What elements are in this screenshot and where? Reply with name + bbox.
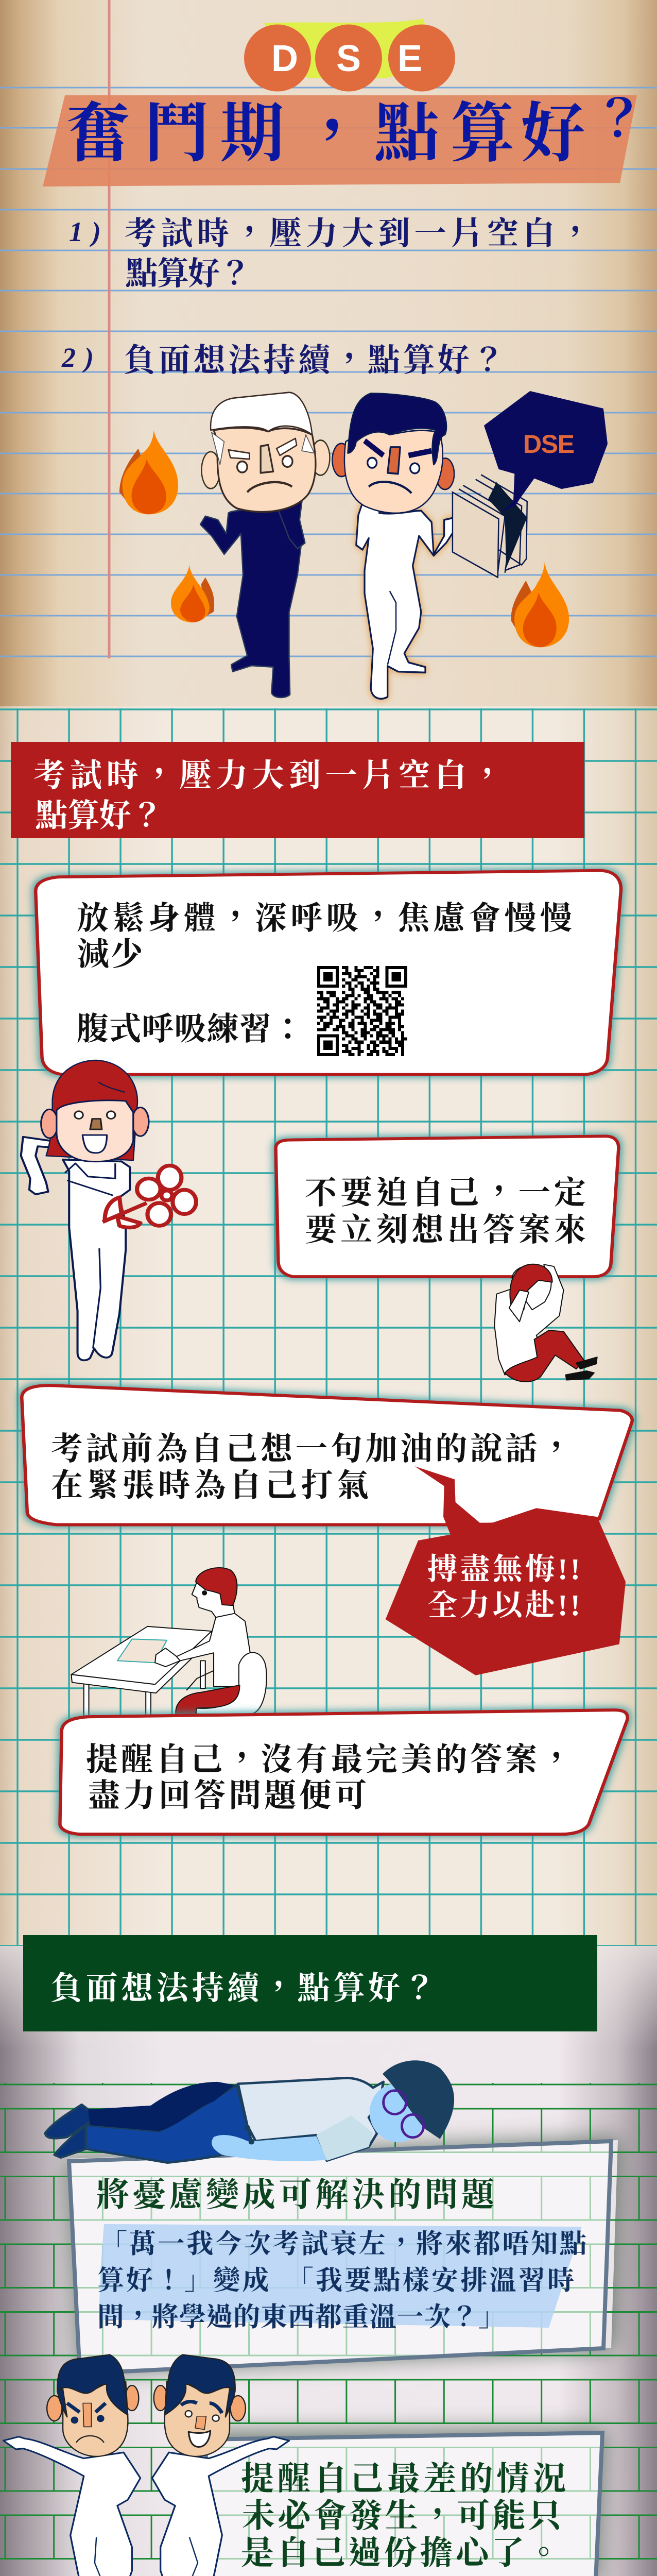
panel: turn worries into solvable problems — [69, 2141, 611, 2374]
panel: relax and breathe: 放鬆身體，深呼吸，焦慮會慢慢 — [77, 901, 572, 936]
panel: worst case may not happen: 提醒自己最差的情況 — [241, 2461, 566, 2497]
panel: worst case may not happen: 是自己過份擔心了。 — [241, 2535, 560, 2571]
heading: negative thoughts: 負面想法持續，點算好？ — [50, 1971, 436, 2006]
highlight block — [99, 2224, 582, 2328]
intro list — [61, 216, 591, 378]
badge: DSE circles — [244, 19, 455, 92]
panel: do not force yourself: 不要迫自己，一定 — [305, 1175, 586, 1211]
section background: green brick grid — [0, 1946, 657, 2576]
panel: relax and breathe — [36, 871, 621, 1075]
intro list: 點算好？ — [126, 256, 251, 292]
panel: self-encouragement: 在緊張時為自己打氣 — [51, 1468, 369, 1503]
character: person holding head — [494, 1264, 597, 1382]
character: student at desk — [71, 1568, 267, 1716]
panel: no perfect answer — [60, 1710, 628, 1834]
panel: worst case may not happen: 未必會發生，可能只 — [242, 2498, 563, 2534]
speech bubble: DSE — [484, 391, 608, 512]
panel: self-encouragement: 考試前為自己想一句加油的說話， — [51, 1432, 572, 1467]
panel: no perfect answer: 盡力回答問題便可 — [88, 1778, 367, 1814]
heading: exam stress: 點算好？ — [36, 798, 163, 834]
panel: no perfect answer: 提醒自己，沒有最完美的答案， — [86, 1742, 572, 1777]
section background: teal grid paper — [0, 706, 657, 1946]
badge: DSE circles: E — [397, 38, 422, 79]
title banner: ？ — [594, 91, 645, 148]
title banner: 奮鬥期，點算好 — [66, 99, 585, 170]
title banner — [43, 91, 645, 187]
panel: turn worries into solvable problems: 算好！」變成 「我要點樣安排溫習時 — [97, 2266, 574, 2296]
panel: turn worries into solvable problems: 間，將學過的東西都重溫一次？」 — [97, 2303, 505, 2332]
intro list: 1) — [69, 216, 101, 247]
heading: exam stress — [11, 742, 584, 838]
heading: exam stress: 考試時，壓力大到一片空白， — [33, 758, 503, 793]
panel: do not force yourself — [275, 1136, 618, 1277]
intro list: 考試時，壓力大到一片空白， — [125, 216, 591, 251]
icon: exam paper stack — [453, 474, 527, 578]
speech bubble: red encouragement — [386, 1466, 626, 1675]
panel: relax and breathe: 減少 — [77, 937, 145, 972]
character: girl with flower — [21, 1060, 196, 1360]
badge: DSE circles: D — [271, 38, 298, 79]
panel: self-encouragement — [22, 1385, 632, 1524]
intro list: 2) — [61, 342, 94, 373]
QR code: breathing exercise — [317, 966, 407, 1056]
panel: relax and breathe: 腹式呼吸練習： — [77, 1012, 304, 1047]
panel: worst case may not happen — [205, 2433, 602, 2576]
intro list: 負面想法持續，點算好？ — [124, 343, 505, 378]
panel: turn worries into solvable problems: 「萬一我今次考試衰左，將來都唔知點 — [100, 2229, 586, 2259]
character: person lying face down — [45, 2060, 454, 2163]
badge: DSE circles: S — [336, 38, 361, 79]
panel: do not force yourself: 要立刻想出答案來 — [305, 1212, 586, 1248]
bubble label: DSE: DSE — [523, 430, 575, 459]
characters: frowning and smiling twins — [4, 2354, 289, 2576]
speech bubble: red encouragement: 全力以赴!! — [427, 1588, 580, 1622]
panel: turn worries into solvable problems: 將憂慮變成可解決的問題 — [96, 2177, 497, 2213]
speech bubble: red encouragement: 搏盡無悔!! — [427, 1552, 580, 1586]
student in navy with white hair — [200, 393, 330, 698]
student in white with navy hair — [332, 393, 457, 699]
section background: notebook paper — [0, 0, 657, 709]
heading: negative thoughts — [23, 1935, 597, 2031]
illustration: flames, two students and DSE worry bubble — [119, 391, 608, 699]
icon: flames — [119, 430, 569, 647]
